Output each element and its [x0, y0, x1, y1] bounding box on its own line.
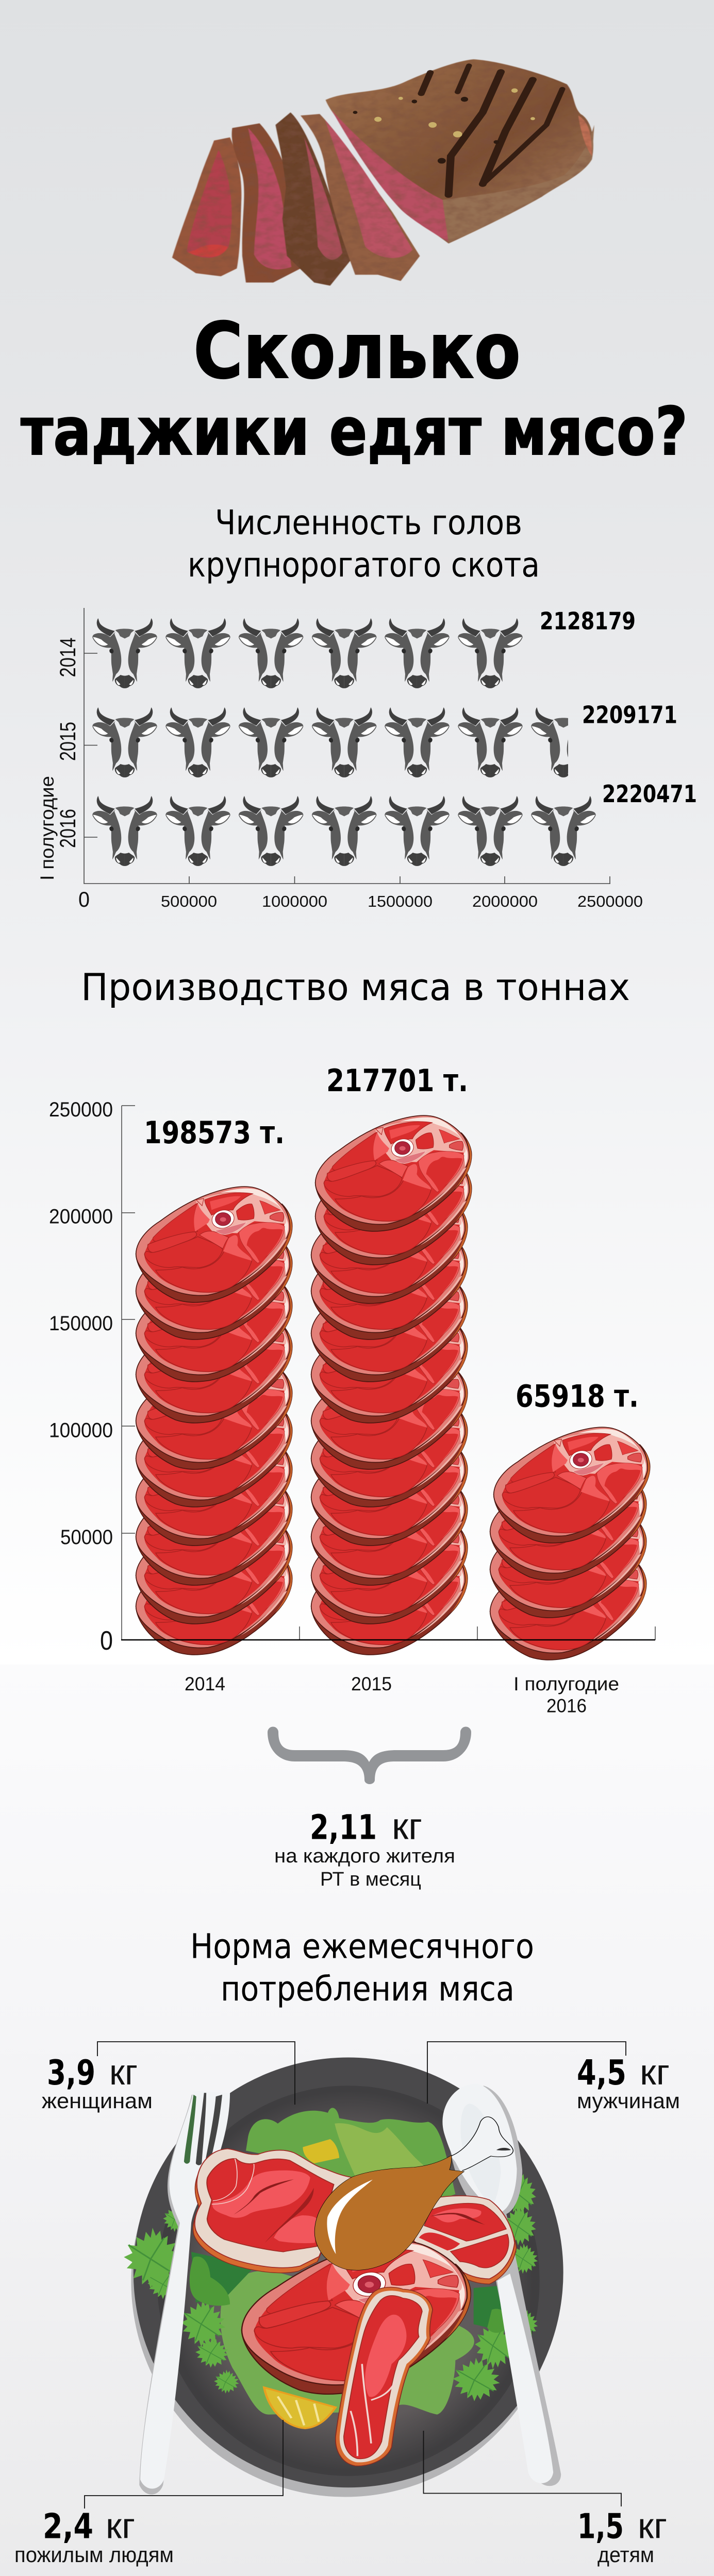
cattle x labels: 2500000 [577, 892, 643, 910]
callout: elderly: пожилым людям [14, 2543, 174, 2567]
illustration: plate with meat [124, 2057, 563, 2497]
meat x labels [185, 1673, 619, 1717]
cattle values: 2128179 [540, 607, 636, 635]
cattle values [540, 607, 697, 808]
heading: cattle: крупнорогатого скота [188, 545, 540, 585]
cattle x labels: 500000 [161, 892, 217, 910]
lemon [264, 2387, 336, 2428]
steak round with bone [242, 2241, 471, 2394]
heading: consumption norm: Норма ежемесячного [190, 1927, 534, 1966]
photo: sliced grilled steak [172, 59, 594, 285]
steak right [413, 2196, 517, 2284]
cattle values: 2209171 [582, 701, 677, 728]
meat y labels: 250000 [49, 1098, 113, 1121]
plate [131, 2057, 563, 2497]
callout: children [577, 2506, 667, 2567]
callout: women [42, 2052, 153, 2113]
heading: cattle [188, 503, 540, 585]
greens [124, 2108, 538, 2415]
meat values [144, 1063, 639, 1415]
callout: per capita: РТ в месяц [320, 1869, 421, 1890]
callout: per capita: кг [392, 1806, 422, 1848]
heading: consumption norm [190, 1927, 534, 2009]
cattle x labels: 1000000 [262, 892, 327, 910]
cattle chart axes [84, 608, 610, 884]
callout: women: женщинам [42, 2089, 153, 2113]
callout: children: 1,5 [577, 2506, 624, 2546]
meat x labels: 2016 [546, 1695, 587, 1717]
row 2015 cows [92, 707, 596, 777]
cattle y labels [37, 638, 80, 880]
meat y labels: 150000 [49, 1312, 113, 1335]
callout: per capita: 2,11 [310, 1807, 377, 1848]
stack 2016 [490, 1427, 650, 1660]
chart: meat production [49, 1063, 655, 1717]
callout: children: кг [638, 2506, 667, 2546]
meat y labels: 0 [100, 1626, 113, 1656]
callout: men: мужчинам [577, 2089, 680, 2113]
cattle x labels [78, 887, 643, 911]
meat chart axes [122, 1106, 655, 1640]
meat values: 65918 т. [516, 1379, 639, 1415]
meat values: 198573 т. [144, 1115, 285, 1151]
callout: men [577, 2052, 680, 2113]
cattle x labels: 1500000 [368, 892, 433, 910]
cattle y labels: I полугодие [37, 776, 58, 880]
title [21, 307, 688, 470]
stack 2015 [311, 1115, 472, 1655]
fork [139, 2091, 230, 2495]
chart: cattle pictogram [37, 607, 697, 911]
meat x labels: 2014 [185, 1673, 225, 1694]
steak long [336, 2287, 433, 2466]
meat y labels: 200000 [49, 1206, 113, 1228]
callout: elderly [14, 2506, 174, 2567]
chicken bone [451, 2117, 513, 2171]
callout: elderly: кг [106, 2506, 135, 2546]
leader lines [85, 2042, 626, 2509]
cattle y labels: 2014 [56, 638, 80, 677]
meat y labels [49, 1098, 113, 1656]
callout: women: 3,9 [47, 2053, 95, 2093]
icon: curly brace [268, 1727, 471, 1784]
callout: men: 4,5 [577, 2053, 626, 2093]
steak left [193, 2149, 353, 2273]
cattle y labels: 2015 [56, 722, 80, 761]
meat y labels: 50000 [60, 1526, 113, 1549]
callout: children: детям [597, 2543, 654, 2567]
callout: women: кг [109, 2052, 138, 2092]
cattle x labels: 2000000 [472, 892, 538, 910]
callout: elderly: 2,4 [43, 2506, 93, 2546]
meat x labels: 2015 [351, 1673, 392, 1694]
callout: men: кг [640, 2052, 670, 2092]
meat y labels: 100000 [49, 1419, 113, 1442]
heading: cattle: Численность голов [215, 503, 522, 543]
callout: per capita [274, 1806, 455, 1890]
chicken drumstick [314, 2155, 464, 2270]
spoon [442, 2084, 561, 2486]
cattle y labels: 2016 [56, 809, 80, 848]
meat x labels: I полугодие [513, 1673, 619, 1694]
title: Сколько [193, 307, 521, 396]
cattle x labels: 0 [78, 887, 90, 911]
meat values: 217701 т. [326, 1063, 468, 1099]
heading: meat production: Производство мяса в тоннах [81, 965, 630, 1009]
heading: consumption norm: потребления мяса [221, 1969, 514, 2009]
callout: per capita: на каждого жителя [274, 1845, 455, 1867]
row 2014 cows [92, 618, 523, 688]
stack 2014 [136, 1187, 292, 1655]
row 2016 cows [92, 795, 596, 866]
